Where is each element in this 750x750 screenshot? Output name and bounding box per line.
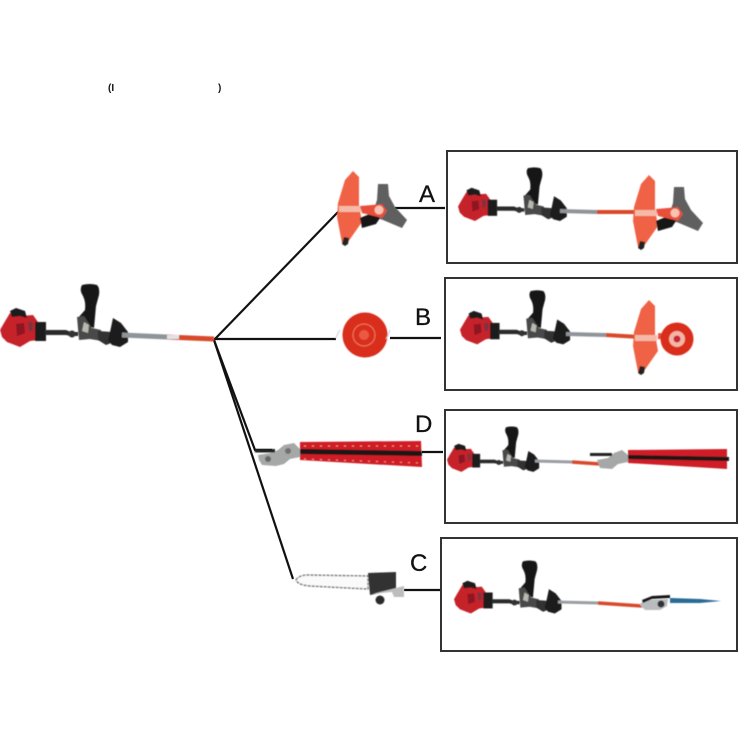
label D: D bbox=[415, 411, 432, 438]
label B: B bbox=[415, 304, 431, 331]
label A: A bbox=[419, 181, 435, 208]
panel B bbox=[445, 278, 737, 390]
tool with pole saw bbox=[454, 561, 721, 613]
label C: C bbox=[410, 550, 427, 577]
panel C bbox=[441, 538, 737, 651]
tool with brush blade bbox=[458, 167, 703, 250]
cropped caption fragment: (I bbox=[108, 83, 114, 94]
connector lines bbox=[214, 208, 445, 590]
attachment A: brush blade bbox=[337, 171, 407, 246]
panel A bbox=[447, 151, 737, 263]
attachment C: chainsaw bbox=[296, 572, 404, 604]
main tool: engine, handle and shaft bbox=[0, 284, 214, 347]
tool with hedge trimmer bbox=[447, 426, 729, 472]
attachment D: hedge trimmer bbox=[255, 441, 422, 467]
panel D bbox=[445, 410, 737, 523]
cropped caption fragment: ) bbox=[218, 83, 221, 94]
tool with trimmer head bbox=[460, 290, 694, 375]
cropped caption fragment bbox=[108, 83, 221, 94]
attachment B: trimmer head bbox=[336, 312, 390, 358]
